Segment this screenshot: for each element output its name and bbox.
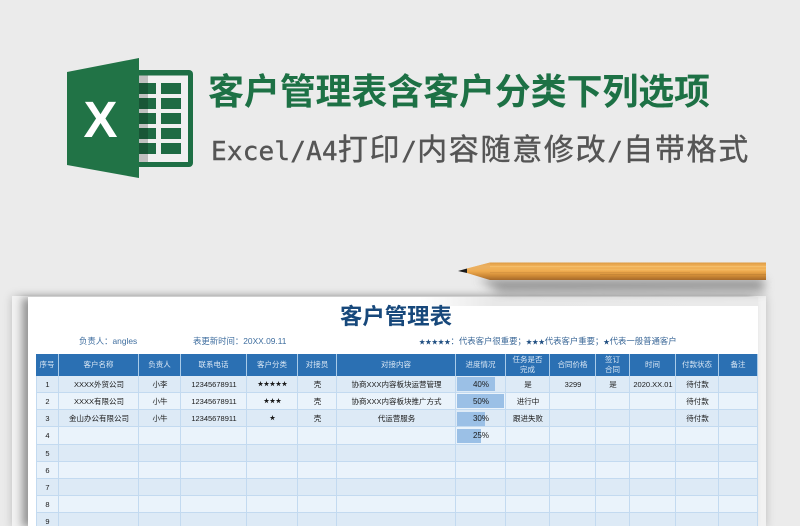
row 4: 4 bbox=[45, 430, 50, 440]
table header row: 客户分类 bbox=[257, 360, 287, 369]
row 3: 代运营服务 bbox=[378, 414, 415, 422]
table header row: 序号 bbox=[40, 360, 54, 369]
row 2: 2 bbox=[45, 396, 50, 406]
title: 客户管理表含客户分类下列选项 bbox=[208, 71, 710, 112]
row 1: 40% bbox=[473, 380, 489, 388]
star legend: ★★★★★：代表客户很重要；★★★代表客户重要；★代表一般普通客户 bbox=[419, 336, 677, 346]
row 2: 12345678911 bbox=[191, 396, 237, 406]
row 2: 壳 bbox=[314, 396, 321, 406]
row numbers 5 to 9: 5 bbox=[45, 448, 50, 458]
row numbers 5 to 9: 6 bbox=[45, 466, 50, 474]
row 1 bbox=[45, 380, 709, 388]
row 1: 协商XXX内容板块运营管理 bbox=[351, 380, 442, 388]
row numbers 5 to 9: 9 bbox=[45, 516, 50, 526]
row 2: 协商XXX内容板块推广方式 bbox=[351, 396, 442, 406]
table header row: 客户名称 bbox=[84, 360, 114, 369]
pencil shadow falling on sheet bbox=[420, 297, 758, 306]
owner label: 负责人：angles bbox=[79, 336, 137, 346]
row 2: XXXX有限公司 bbox=[74, 396, 124, 406]
table header row bbox=[36, 354, 758, 376]
row 3: ★ bbox=[269, 416, 276, 422]
row 4 bbox=[45, 430, 489, 440]
table header row: 合同价格 bbox=[558, 360, 588, 369]
table header row: 签订 bbox=[605, 355, 620, 364]
row 3: 12345678911 bbox=[191, 414, 237, 422]
row 1: 12345678911 bbox=[191, 380, 237, 388]
row 2: 待付款 bbox=[686, 396, 709, 406]
table header row: 联系电话 bbox=[198, 360, 228, 369]
row 3 bbox=[45, 414, 709, 422]
row 2: 小牛 bbox=[152, 396, 168, 406]
row 2: 进行中 bbox=[517, 396, 539, 406]
row numbers 5 to 9 bbox=[45, 448, 50, 526]
update time label: 表更新时间：20XX.09.11 bbox=[193, 336, 286, 346]
row 3: 金山办公有限公司 bbox=[69, 414, 129, 422]
row 2 bbox=[45, 396, 709, 406]
row numbers 5 to 9: 8 bbox=[45, 500, 50, 508]
row 1: 1 bbox=[45, 380, 50, 388]
table header row: 任务是否 bbox=[512, 355, 542, 364]
row 1: 待付款 bbox=[686, 380, 709, 388]
row 3: 壳 bbox=[314, 414, 321, 422]
table header row: 进度情况 bbox=[466, 360, 496, 369]
table header row: 付款状态 bbox=[682, 360, 712, 369]
sheet heading: 客户管理表 bbox=[340, 304, 452, 329]
table header row: 备注 bbox=[730, 360, 746, 369]
row 3: 3 bbox=[45, 414, 50, 422]
row 1: 是 bbox=[609, 380, 617, 388]
row 1: ★★★★★ bbox=[257, 382, 288, 388]
row 1: 2020.XX.01 bbox=[633, 380, 673, 388]
table header row: 对接员 bbox=[306, 360, 328, 369]
table header row: 时间 bbox=[645, 360, 660, 369]
row 2: ★★★ bbox=[263, 398, 282, 404]
panel: white spreadsheet sheet bbox=[28, 297, 758, 526]
row 3: 30% bbox=[473, 414, 489, 422]
row 2: 50% bbox=[473, 396, 489, 406]
row 3: 小牛 bbox=[152, 414, 168, 422]
table header row: 完成 bbox=[520, 365, 535, 374]
back paper bbox=[12, 296, 766, 526]
row 4: 25% bbox=[473, 430, 489, 440]
table header row: 合同 bbox=[605, 365, 620, 374]
row 3: 跟进失败 bbox=[513, 414, 543, 422]
subtitle: Excel/A4打印/内容随意修改/自带格式 bbox=[211, 134, 750, 167]
progress bars bbox=[457, 377, 504, 443]
row 1: 小李 bbox=[152, 380, 168, 388]
row 1: 壳 bbox=[314, 380, 321, 388]
icon: Excel logo: X bbox=[83, 91, 118, 148]
icon: pencil bbox=[458, 262, 770, 298]
row 1: 3299 bbox=[565, 380, 581, 388]
table header row: 对接内容 bbox=[381, 360, 411, 369]
row 3: 待付款 bbox=[686, 414, 709, 422]
row 1: 是 bbox=[524, 380, 532, 388]
row 1: XXXX外贸公司 bbox=[74, 380, 124, 388]
row numbers 5 to 9: 7 bbox=[45, 482, 50, 492]
table header row: 负责人 bbox=[148, 360, 171, 369]
icon: Excel logo bbox=[67, 58, 193, 178]
